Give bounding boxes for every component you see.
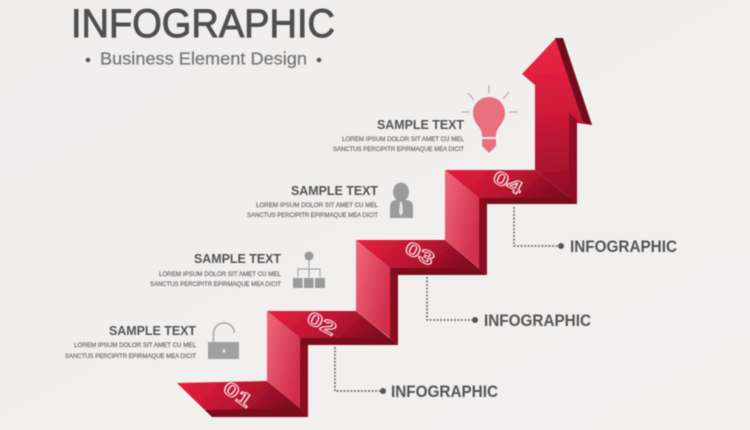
callout: infographic 2	[335, 347, 498, 401]
subtitle: Business Element Design	[100, 48, 307, 68]
text block: sample text 4: SANCTUS PERCIPITR EPIRMAQUE MEA DICIT	[333, 147, 464, 153]
text block: sample text 3	[247, 183, 379, 219]
text block: sample text 1: LOREM IPSUM DOLOR SIT AMET CU MEL	[74, 343, 197, 349]
rising staircase arrow	[177, 38, 592, 417]
callout: infographic 3	[427, 277, 591, 330]
arrow body	[522, 38, 592, 204]
arrow shaft right shade	[569, 113, 577, 204]
step 1	[177, 338, 308, 417]
title: INFOGRAPHIC	[71, 2, 335, 46]
riser 1	[267, 311, 300, 408]
text block: sample text 4: LOREM IPSUM DOLOR SIT AMET CU MEL	[342, 137, 465, 143]
step 3	[356, 240, 487, 275]
step numbers	[219, 166, 526, 412]
icon: businessman	[390, 182, 413, 218]
callout: infographic 2: INFOGRAPHIC	[391, 382, 498, 401]
icon: org chart	[293, 252, 325, 288]
number 01: 01	[219, 377, 256, 412]
riser 2	[356, 240, 390, 338]
riser 3	[445, 170, 479, 268]
number 03: 03	[401, 237, 438, 270]
text block: sample text 1: SAMPLE TEXT	[109, 323, 196, 338]
text block: sample text 2: LOREM IPSUM DOLOR SIT AMET CU MEL	[159, 272, 282, 278]
text block: sample text 4: SAMPLE TEXT	[377, 117, 464, 132]
step 3 side shade	[479, 198, 487, 275]
number 04: 04	[489, 166, 526, 199]
callout: infographic 4	[514, 207, 677, 256]
text block: sample text 2: SANCTUS PERCIPITR EPIRMAQUE MEA DICIT	[150, 282, 281, 288]
callout: infographic 1	[245, 417, 247, 430]
step 2	[267, 311, 398, 345]
number 02: 02	[303, 307, 340, 340]
text block: sample text 3: SANCTUS PERCIPITR EPIRMAQUE MEA DICIT	[247, 213, 378, 219]
icon: open padlock	[208, 323, 239, 359]
callout: infographic 4: INFOGRAPHIC	[570, 237, 677, 256]
icon: light bulb	[461, 85, 517, 153]
step 2 side shade	[390, 268, 398, 345]
callout: infographic 3: INFOGRAPHIC	[484, 311, 591, 330]
text block: sample text 3: SAMPLE TEXT	[291, 183, 378, 198]
text block: sample text 3: LOREM IPSUM DOLOR SIT AMET CU MEL	[256, 203, 379, 209]
text block: sample text 1	[65, 323, 197, 360]
text block: sample text 4	[333, 117, 465, 153]
text block: sample text 1: SANCTUS PERCIPITR EPIRMAQUE MEA DICIT	[65, 354, 196, 360]
arrow head dark side	[555, 38, 592, 125]
text block: sample text 2	[150, 251, 282, 288]
step 4	[445, 170, 577, 204]
text block: sample text 2: SAMPLE TEXT	[194, 251, 281, 266]
